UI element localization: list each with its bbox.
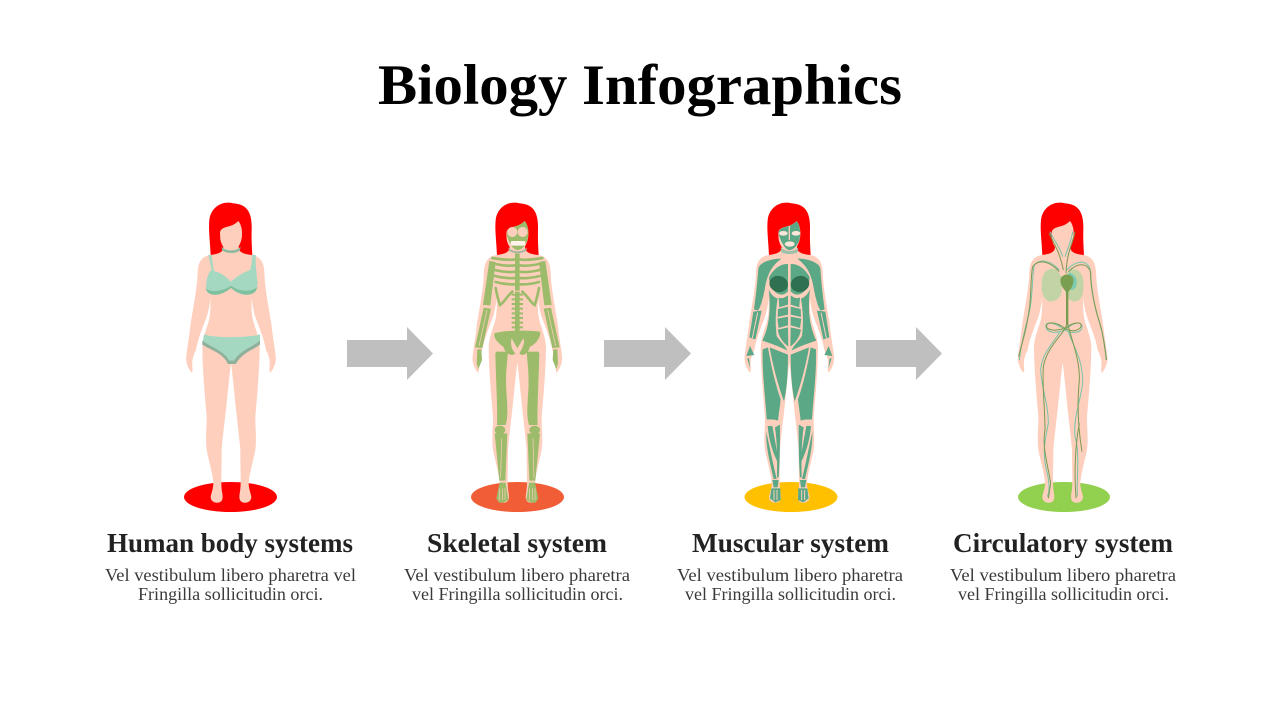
description: vel Fringilla sollicitudin orci.: [412, 584, 623, 604]
figure: body with underwear: [186, 203, 276, 503]
platform: orange ellipse: [471, 482, 564, 512]
figure: skeleton: [473, 203, 562, 503]
figure: muscles: [745, 203, 834, 503]
description: vel Fringilla sollicitudin orci.: [685, 584, 896, 604]
arrow 2: [604, 327, 691, 380]
description: Vel vestibulum libero pharetra vel: [105, 565, 356, 585]
column: skeletal system: [404, 203, 630, 604]
arrow 1: [347, 327, 433, 380]
column: circulatory system: [950, 203, 1176, 604]
heading: Skeletal system: [427, 528, 608, 558]
description: Fringilla sollicitudin orci.: [138, 584, 323, 604]
description: vel Fringilla sollicitudin orci.: [958, 584, 1169, 604]
heading: Muscular system: [692, 528, 889, 558]
description: Vel vestibulum libero pharetra: [950, 565, 1176, 585]
figure: circulatory: [1018, 203, 1107, 503]
heading: Circulatory system: [953, 528, 1173, 558]
platform: red ellipse: [184, 482, 277, 512]
platform: yellow ellipse: [744, 482, 838, 512]
title: Biology Infographics: [378, 54, 902, 117]
heading: Human body systems: [107, 528, 353, 558]
arrow 3: [856, 327, 942, 380]
platform: green ellipse: [1018, 482, 1110, 512]
description: Vel vestibulum libero pharetra: [404, 565, 630, 585]
column: muscular system: [677, 203, 903, 604]
description: Vel vestibulum libero pharetra: [677, 565, 903, 585]
column: human body systems: [105, 203, 356, 604]
